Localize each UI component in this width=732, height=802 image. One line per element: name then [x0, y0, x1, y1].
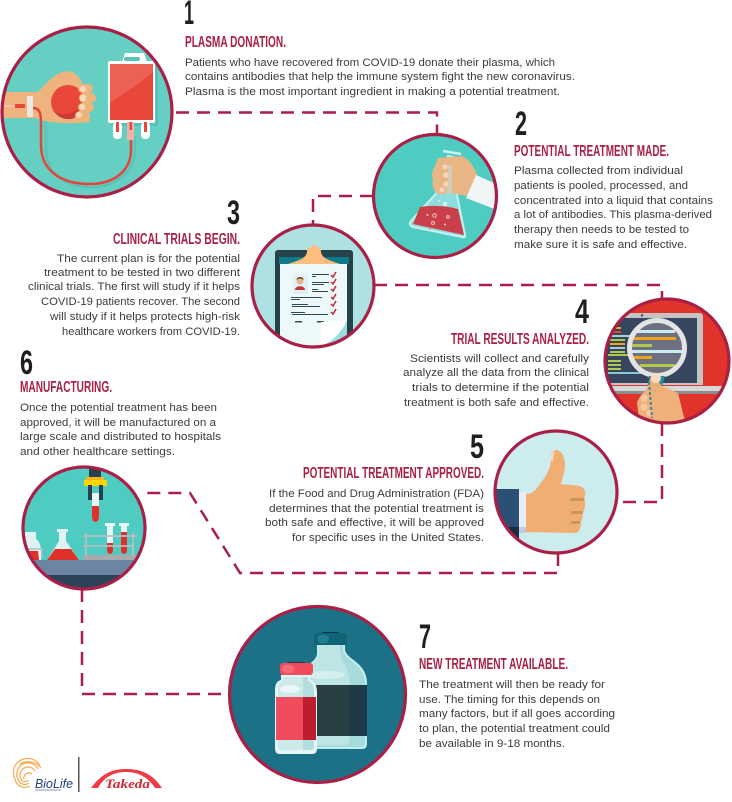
logo divider [78, 757, 80, 792]
step 2 text [514, 105, 714, 251]
step 5 text: both safe and effective, it will be approved [265, 517, 484, 529]
icon: plasma donation circle [0, 27, 172, 197]
step 6 text: MANUFACTURING. [20, 379, 112, 396]
icon: thumbs up circle [490, 431, 617, 553]
icon: medicine bottles circle [230, 606, 406, 782]
step 4 text: treatment is both safe and effective. [404, 397, 589, 409]
step 3 text: will study if it helps protects high-risk [49, 311, 241, 323]
step 3 text [28, 194, 241, 338]
step 3 text: 3 [227, 194, 240, 232]
step 7 text: The treatment will then be ready for [419, 679, 605, 691]
dashed connector: step 2 to step 3 [313, 196, 373, 225]
step 2 text: 2 [515, 105, 527, 143]
step 2 text: make sure it is safe and effective. [514, 239, 687, 251]
step 7 text [419, 618, 615, 750]
step 3 text: COVID-19 patients recover. The second [41, 296, 240, 308]
step 6 text: 6 [20, 344, 33, 382]
step 7 text: be available in 9-18 months. [419, 738, 565, 750]
step 4 text: Scientists will collect and carefully [410, 353, 590, 365]
step 4 text [403, 293, 590, 409]
step 2 text: patients is pooled, processed, and [514, 180, 688, 192]
step 3 text: healthcare workers from COVID-19. [62, 326, 240, 338]
step 6 text: Once the potential treatment has been [20, 402, 217, 414]
step 5 text: POTENTIAL TREATMENT APPROVED. [303, 465, 484, 482]
step 1 text [184, 0, 575, 98]
logo: BioLife [13, 758, 73, 791]
step 1 text: Plasma is the most important ingredient in making a potential treatment. [185, 86, 560, 98]
step 7 text: NEW TREATMENT AVAILABLE. [419, 656, 568, 673]
dashed connector: step 3 to step 4 [374, 285, 662, 299]
step 5 text: 5 [470, 428, 484, 466]
step 2 text: Plasma collected from individual [514, 165, 683, 177]
step 4 text: TRIAL RESULTS ANALYZED. [451, 331, 589, 348]
dashed connector: step 5 to step 6 [145, 493, 558, 573]
step 1 text: PLASMA DONATION. [185, 34, 286, 51]
step 1 text: Patients who have recovered from COVID-19 donate their plasma, which [185, 57, 555, 69]
logo: BioLife: BioLife [35, 776, 73, 791]
step 5 text: determines that the potential treatment is [269, 503, 485, 515]
step 5 text [265, 428, 485, 544]
step 7 text: many factors, but if all goes according [419, 708, 615, 720]
step 3 text: treatment to be tested in two different [44, 267, 240, 279]
step 6 text: large scale and distributed to hospitals [20, 431, 222, 443]
step 6 text [20, 344, 222, 458]
step 1 text: contains antibodies that help the immune system fight the new coronavirus. [185, 71, 575, 83]
icon: clipboard circle [252, 225, 374, 360]
step 2 text: therapy then needs to be tested to [514, 224, 689, 236]
step 3 text: clinical trials. The first will study if it helps [28, 281, 241, 293]
step 5 text: If the Food and Drug Administration (FDA) [269, 488, 484, 500]
icon: laptop and magnifier circle [600, 299, 729, 425]
step 7 text: 7 [419, 618, 431, 656]
step 6 text: and other healthcare settings. [20, 446, 175, 458]
icon: flask circle [374, 134, 510, 258]
step 2 text: concentrated into a liquid that contains [514, 195, 714, 207]
step 7 text: use. The timing for this depends on [419, 694, 600, 706]
dashed connector: step 6 to step 7 [82, 589, 229, 694]
step 6 text: approved, it will be manufactured on a [20, 417, 217, 429]
step 4 text: 4 [575, 293, 589, 331]
step 4 text: trials to determine if the potential [412, 382, 589, 394]
step 3 text: CLINICAL TRIALS BEGIN. [113, 231, 240, 248]
step 5 text: for specific uses in the United States. [292, 532, 484, 544]
dashed connector: step 1 to step 2 [176, 112, 437, 134]
step 7 text: to plan, the potential treatment could [419, 723, 610, 735]
step 2 text: a lot of antibodies. This plasma-derived [514, 209, 712, 221]
logo: Takeda [91, 769, 162, 791]
icon: manufacturing lab circle [20, 467, 150, 591]
dashed connector: step 4 to step 5 [617, 423, 662, 502]
logo: Takeda: Takeda [105, 776, 151, 791]
step 4 text: analyze all the data from the clinical [403, 367, 589, 379]
step 3 text: The current plan is for the potential [57, 253, 240, 265]
